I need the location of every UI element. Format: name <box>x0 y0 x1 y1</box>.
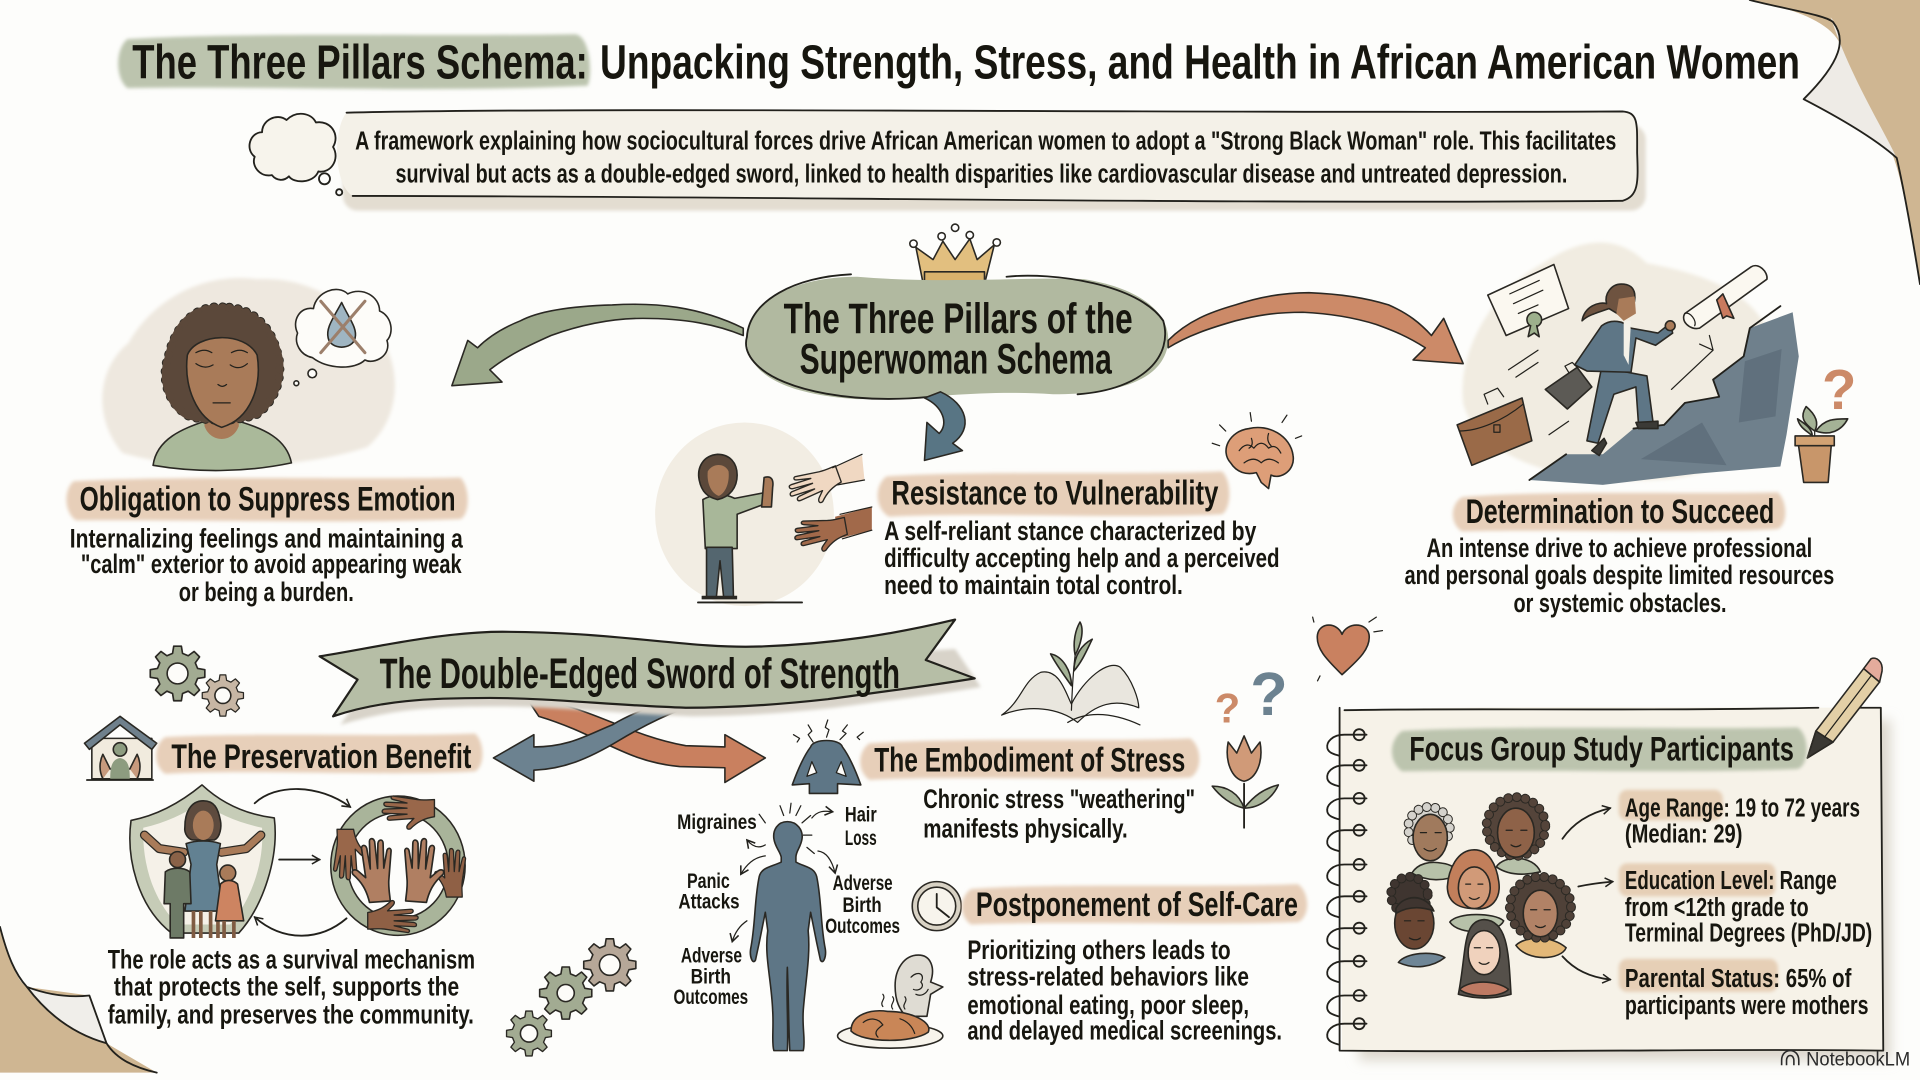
body: preservation: that protects the self, supports the <box>114 972 459 1002</box>
arrow: orange to determination <box>1168 293 1463 364</box>
body: obligation: or being a burden. <box>179 577 354 607</box>
symptom callouts: Outcomes <box>825 915 900 938</box>
NotebookLM watermark: NotebookLM <box>1806 1048 1910 1070</box>
statistic: age range: (Median: 29) <box>1625 820 1742 848</box>
body: preservation: family, and preserves the community. <box>108 1000 474 1030</box>
statistic: education level: Education Level: Range <box>1625 867 1837 895</box>
symptom callouts: Migraines <box>677 811 757 834</box>
label: postponement <box>962 884 1307 924</box>
panel: obligation to suppress emotion <box>66 278 468 607</box>
statistic: age range <box>1619 790 1860 848</box>
icon: thought bubble with crossed-out tear <box>294 289 391 386</box>
arrows between shield and ring <box>255 789 350 936</box>
symptom callouts: Adverse <box>833 872 893 895</box>
illustration: ring of hands <box>334 796 466 933</box>
intro text box with thought cloud: survival but acts as a double-edged sword, linked to health disparities like cardiovascular disease and untreated depression. <box>396 160 1567 188</box>
symptom callouts: Panic <box>687 870 730 893</box>
face: long hair <box>1458 920 1511 998</box>
face: curly hair <box>1510 877 1571 958</box>
body: embodiment <box>923 784 1195 844</box>
crossing arrow: orange to embodiment of stress <box>527 698 765 782</box>
body: resistance <box>884 516 1280 600</box>
body: postponement: and delayed medical screenings. <box>967 1016 1282 1046</box>
body: obligation <box>70 523 464 607</box>
arrow: blue to resistance <box>924 392 965 460</box>
icon: diploma scroll <box>1684 266 1767 329</box>
body: resistance: need to maintain total control. <box>884 570 1183 600</box>
body: embodiment: Chronic stress "weathering" <box>923 784 1195 814</box>
panel: determination to succeed <box>1404 243 1856 618</box>
icon: potted plant <box>1795 407 1848 482</box>
panel: preservation benefit <box>84 716 482 1030</box>
statistic: parental status: Parental Status: 65% of <box>1625 965 1852 993</box>
small briefcase <box>1545 367 1592 409</box>
label: resistance: Resistance to Vulnerability <box>891 474 1218 512</box>
title: The Three Pillars Schema: <box>132 36 588 89</box>
icon: heart <box>1313 617 1382 681</box>
body: determination: or systemic obstacles. <box>1513 588 1727 618</box>
arrow: green to suppress emotion <box>452 304 743 386</box>
symptom callouts: Adverse <box>681 944 742 967</box>
spiral binding <box>1327 729 1367 1044</box>
label: obligation <box>66 478 468 521</box>
figure <box>1587 367 1653 443</box>
icon: brain <box>1212 413 1302 489</box>
symptom callouts: Birth <box>691 965 731 988</box>
panel: postponement of self-care <box>838 882 1307 1048</box>
icon: thought bubble over roast dinner <box>838 955 943 1048</box>
crossing arrow: blue to preservation benefit <box>493 688 722 781</box>
symptom callouts: Loss <box>845 827 877 850</box>
panel: resistance to vulnerability <box>655 413 1302 606</box>
symptom callouts: Hair <box>845 804 877 827</box>
icon: tulip <box>1212 736 1278 828</box>
face: hair bun <box>1391 877 1445 967</box>
statistic: education level: from <12th grade to <box>1625 894 1809 922</box>
thought cloud <box>249 114 342 195</box>
body: postponement <box>967 935 1282 1046</box>
icon: offered helping hands <box>785 454 872 556</box>
icon: question marks <box>1215 660 1288 731</box>
label: resistance <box>878 471 1229 517</box>
decoration: rocks and sprout <box>1002 622 1140 725</box>
illustration: woman climbing a mountain <box>1462 243 1799 485</box>
statistic: parental status <box>1619 959 1869 1020</box>
illustration: shield protecting woman and children <box>130 785 275 938</box>
panel: embodiment of stress <box>673 720 1199 1051</box>
intro text box with thought cloud <box>249 110 1646 211</box>
icon: crown <box>910 224 1000 285</box>
statistic: education level <box>1619 863 1872 948</box>
face: grey hair <box>1407 806 1460 880</box>
icon: question marks: ? <box>1215 684 1240 731</box>
label: determination: Determination to Succeed <box>1466 493 1774 531</box>
icon: certificate <box>1488 264 1569 337</box>
label: embodiment <box>860 738 1199 780</box>
icon: clock <box>912 882 961 931</box>
body: embodiment: manifests physically. <box>923 814 1128 844</box>
central oval: the three pillars <box>746 224 1168 399</box>
central oval: the three pillars: Superwoman Schema <box>800 335 1113 383</box>
body: obligation: "calm" exterior to avoid appearing weak <box>81 549 462 579</box>
body: postponement: Prioritizing others leads to <box>967 935 1231 965</box>
illustration: body silhouette <box>750 822 826 1051</box>
illustration: figure refusing help <box>655 422 834 606</box>
symptom callouts: Birth <box>842 894 882 917</box>
icon: question mark: ? <box>1822 358 1856 421</box>
label: obligation: Obligation to Suppress Emotion <box>80 481 456 519</box>
body: resistance: difficulty accepting help and a perceived <box>884 543 1280 573</box>
body: obligation: Internalizing feelings and maintaining a <box>70 523 464 553</box>
panel: focus group study participants notebook <box>1327 658 1891 1060</box>
body: preservation <box>108 945 475 1030</box>
heading: focus group <box>1392 727 1807 771</box>
title <box>118 34 1800 89</box>
arrows to statistics <box>1562 808 1613 980</box>
symptom callouts: Attacks <box>678 891 740 914</box>
icon: brown briefcase <box>1457 388 1532 465</box>
symptom callouts: Outcomes <box>673 986 748 1009</box>
body: postponement: stress-related behaviors like <box>967 962 1249 992</box>
label: embodiment: The Embodiment of Stress <box>874 741 1185 779</box>
torn paper corner: bottom left <box>0 927 157 1073</box>
banner: the double-edged sword of strength <box>320 620 981 725</box>
body: preservation: The role acts as a survival mechanism <box>108 945 475 975</box>
icon: gears top left <box>150 646 243 716</box>
body: determination <box>1404 533 1834 618</box>
illustration: group of faces <box>1391 797 1571 998</box>
label: preservation <box>156 733 482 776</box>
heading: focus group: Focus Group Study Participants <box>1409 730 1794 768</box>
icon: house with sheltering hands <box>84 716 157 780</box>
body: postponement: emotional eating, poor sleep, <box>967 990 1249 1020</box>
banner: the double-edged sword of strength: The Double-Edged Sword of Strength <box>380 650 900 698</box>
symptom callouts <box>673 803 900 1009</box>
face: auburn hair <box>1447 850 1504 932</box>
illustration: woman with closed eyes <box>102 278 395 471</box>
icon: stressed head <box>792 720 863 793</box>
icon: question marks: ? <box>1250 660 1288 728</box>
label: postponement: Postponement of Self-Care <box>976 886 1298 924</box>
icon: gears bottom <box>507 939 636 1056</box>
torn paper corner: top right <box>1750 0 1920 284</box>
label: preservation: The Preservation Benefit <box>171 738 471 776</box>
icon: pencil <box>1807 658 1882 758</box>
body: resistance: A self-reliant stance characterized by <box>884 516 1256 546</box>
face: dark afro <box>1487 797 1545 874</box>
central oval: the three pillars: The Three Pillars of the <box>784 295 1133 343</box>
